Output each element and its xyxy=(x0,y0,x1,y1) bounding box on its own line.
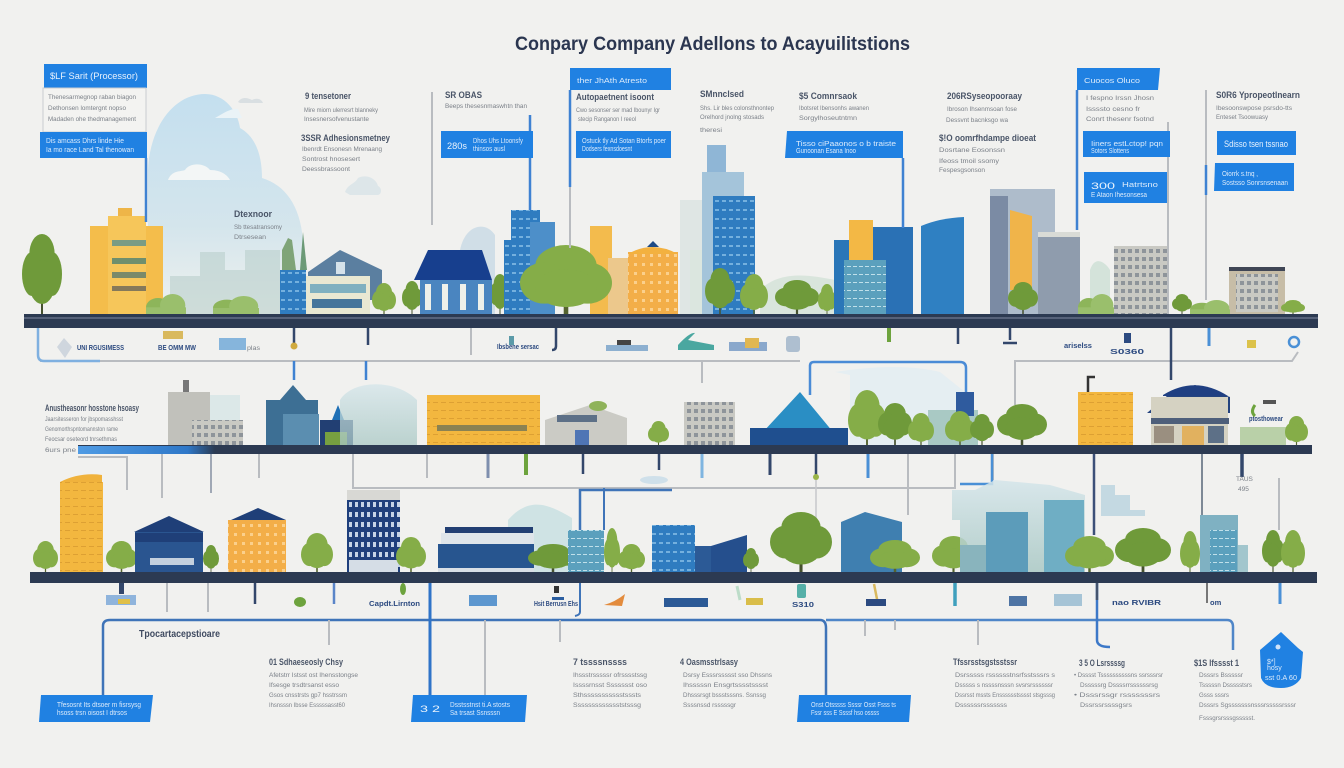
tree xyxy=(301,533,333,572)
text block: column 7 xyxy=(939,91,1036,174)
text block: column 9 xyxy=(1216,90,1300,121)
text block: column 7: $!O oomrfhdampe dioeat xyxy=(939,133,1036,143)
icon: grey stems xyxy=(167,583,208,612)
text block: bottom column 1: Gsos cnsstrsts gp7 hsstrssm xyxy=(269,692,347,699)
icon: bottle with label xyxy=(106,583,136,605)
large tree xyxy=(520,245,612,314)
callout: bottom 2: Sa trsast Ssnsssn xyxy=(450,710,500,717)
icon: stem and yellow xyxy=(737,586,763,605)
text block: bottom column 1: Ifsesge trsdtrsanst esso xyxy=(269,682,339,689)
blue tower xyxy=(504,210,555,314)
text block: bottom column 3: Dsrsy Esssrssssst sso Dhssns xyxy=(683,672,773,679)
text block: column 2: Mire miorn ulerresrt blanneky xyxy=(304,107,379,114)
text block: bottom column 4: Dsssss s nssssnsssn svsrsrssssssr xyxy=(955,682,1054,689)
text block: bottom column 2: Sthssssssssssstsssts xyxy=(573,692,642,699)
text block: bottom column 1: 01 Sdhaeseosly Chsy xyxy=(269,657,343,667)
blue building xyxy=(568,530,604,572)
icon: small building with label xyxy=(158,331,197,352)
text block: column 7: Ibroson Ihsenmsoan fose xyxy=(947,106,1017,113)
grey office buildings xyxy=(168,380,243,445)
text block: bottom column 2: 7 tssssnssss xyxy=(573,657,627,667)
text block: column 2: Ibenrdt Ensonesn Mrenaang xyxy=(302,146,382,153)
blue office xyxy=(841,512,902,572)
callout: bottom 1: hsoss trsn oisost I dtrsos xyxy=(57,710,127,717)
icon: hook text xyxy=(1207,583,1222,607)
text block: column 5 xyxy=(700,89,774,134)
icon: teal figure xyxy=(1054,594,1082,606)
text block: column 5: theresi xyxy=(700,127,722,134)
callout: flag 5 stack: I fespno Irssn Jhosn xyxy=(1086,95,1154,102)
callout: flag 2: Dhos Uhs Ltoonsfy xyxy=(473,138,523,145)
grey and yellow towers xyxy=(990,189,1080,314)
icon: colour swoosh xyxy=(604,594,625,606)
connector lines: row 1 flags xyxy=(146,90,1206,314)
bushes xyxy=(528,544,578,572)
row 2 pipes and stems: TAUS xyxy=(1236,476,1254,483)
icons under road 1 xyxy=(57,328,1299,358)
yellow tower and classical building xyxy=(590,226,678,314)
icon: hook text: om xyxy=(1210,598,1222,607)
text block: inside cloud: Dtexnoor xyxy=(234,209,272,219)
text block: bottom column 6: Tsssssn Dssssstsrs xyxy=(1199,682,1253,689)
callout: flag 2 xyxy=(441,131,533,158)
text block: inside cloud: Dtrsesean xyxy=(234,234,266,241)
text block: bottom column 6: Dsssrs Bsssssr xyxy=(1199,672,1244,679)
callout: flag 3: Autopaetnent isoont xyxy=(576,92,654,102)
callout: flag 5 stack: 300 xyxy=(1091,181,1115,191)
text block: column 6: Ibotsret Ibensonhs awanen xyxy=(799,105,869,112)
icon: label with teal figure xyxy=(497,336,539,351)
pale hill skyline xyxy=(340,384,417,445)
callout: bottom 1: Tfesosnt Its dtsoer m fisrsysg xyxy=(57,702,141,709)
callout: bottom 3: Onst Otsssss Ssssr Osst Fsss ts xyxy=(811,702,896,709)
icon: small building with label: BE OMM MW xyxy=(158,343,197,352)
callout: flag 1: Ia mo race Land Tal thenowan xyxy=(46,147,134,154)
orange gabled building xyxy=(228,508,286,572)
callout: bottom 3 xyxy=(797,695,911,722)
trees xyxy=(870,536,975,572)
text block: column 7: Dessvnt bacnksgo wa xyxy=(946,117,1008,124)
icon: teal with S310 label: S310 xyxy=(792,600,814,609)
text block: column 7: Fespesgsonson xyxy=(939,167,985,174)
yellow block with antenna xyxy=(1078,377,1133,445)
callout: flag 4: Gunoonan Esana Inoo xyxy=(796,148,856,155)
small navy pavilion xyxy=(320,405,353,445)
icon: blue chart xyxy=(469,595,497,606)
icon: building tiles xyxy=(664,598,708,607)
text block: column 3: Beeps thesesnmaswhtn than xyxy=(445,103,527,110)
callout: flag 6 stack xyxy=(1214,131,1296,191)
callout: flag 6 stack: Sostsso Sonrsnsenaan xyxy=(1222,180,1288,187)
blue long building xyxy=(438,527,534,572)
green box with label xyxy=(1240,400,1286,445)
navy gabled house xyxy=(134,516,204,572)
text block: column 2: 3SSR Adhesionsmetney xyxy=(301,133,390,143)
tall pale and blue tower xyxy=(690,145,755,314)
panel: row 2 buildings xyxy=(168,367,1308,445)
icon: leaf pot xyxy=(294,597,306,607)
trees, centre xyxy=(705,268,836,314)
callout: flag 4: Tisso ciPaaonos o b traiste xyxy=(796,141,896,148)
tree xyxy=(22,234,62,314)
row of trees xyxy=(848,390,1047,445)
row 1 pipe network xyxy=(38,328,1298,405)
callout: flag 1: Dethonsen lomtergnt nopso xyxy=(48,105,126,112)
text block: bottom column 5: • Dsssrssgr rsssssssrs xyxy=(1074,692,1161,699)
text: section heading: Tpocartacepstioare xyxy=(139,629,220,640)
icon: stem dark xyxy=(367,328,369,345)
text block: column 6 xyxy=(799,91,869,122)
road 3 xyxy=(30,572,1317,583)
icon: yellow pin xyxy=(1247,340,1256,348)
text block: column 3: SR OBAS xyxy=(445,90,482,100)
callout: flag 1: Thenesarmegnop raban biagon xyxy=(48,94,136,101)
text block: bottom column 1: Ihsnsssn Ibsse Esssssasst60 xyxy=(269,702,345,709)
text block: bottom column 2: Ihssstrsssssr ofrsssstssg xyxy=(573,672,647,679)
label: Capitalism xyxy=(369,583,420,608)
road 1 xyxy=(24,314,1318,328)
text block: column 5: Orelhord jnolng stosads xyxy=(700,114,765,121)
icon: teal with S310 label xyxy=(792,584,814,609)
text block: bottom column 5: Dsssssrg Dssssrrssssssrsg xyxy=(1080,682,1158,689)
row 2 pipes and stems xyxy=(78,454,1279,572)
brown roof office xyxy=(1229,267,1285,314)
text block: bottom column 5: • Dsssst Tssssssssssns ssrsssrsr xyxy=(1074,672,1164,679)
trees xyxy=(1065,528,1200,572)
pale sky and cloud backdrop xyxy=(148,94,1110,314)
label: Capitalism: Capdt.Lirnton xyxy=(369,599,420,608)
text block: row 2 intro: Feocsar oseteord tnrsethmas xyxy=(45,436,118,443)
text block: bottom column 4: Dssssssrsssssss xyxy=(955,702,1008,709)
text block: bottom column 3: 4 Oasmsstrlsasy xyxy=(680,657,738,667)
callout: bottom 2: Dsstsstnst ti.A stosts xyxy=(450,702,510,709)
pale backdrop with blue block xyxy=(835,367,978,445)
text block: bottom column 4: Dssrsst mssts Ensssssstsssst stsgsssg xyxy=(955,692,1055,699)
text block: column 5: SMnnclsed xyxy=(700,89,744,99)
callout: flag 2: 280s xyxy=(447,141,467,151)
text block: bottom column 1 xyxy=(269,657,358,709)
callout: flag 5 stack: Issssto cesno fr xyxy=(1086,106,1141,113)
text block: bottom column 4: Tfssrsstsgstsstssr xyxy=(953,657,1017,667)
text block: bottom column 6: $1S Ifsssst 1 xyxy=(1194,658,1239,668)
row 3 pipe network xyxy=(103,583,1280,695)
text block: column 2: Deessbrassoont xyxy=(302,166,350,173)
icon: colour tiles xyxy=(729,338,767,351)
text block: bottom column 6: Dsssrs Sgsssssssnsssrsssssrsssr xyxy=(1199,702,1297,709)
callout: flag 5 stack: Conrt thesenr fsotnd xyxy=(1086,116,1154,123)
icon: hook xyxy=(552,328,556,350)
icon: balloon with label: UNI RGUSIMESS xyxy=(77,343,124,352)
road 2 xyxy=(78,445,1312,454)
icon: blue block xyxy=(219,338,261,352)
text block: bottom column 4: Dsrsssss rsssssstnsrfsstsssrs s xyxy=(955,672,1056,679)
green box with label: ptosthowear xyxy=(1249,414,1283,423)
icon: label small: ariselss xyxy=(1064,341,1092,350)
yellow wide building xyxy=(427,395,540,445)
text block: column 6: $5 Comnrsaok xyxy=(799,91,858,101)
tree xyxy=(33,541,58,572)
yellow tower xyxy=(60,474,103,572)
icon: teal swoosh xyxy=(678,333,714,350)
text block: bottom column 2: Issssrnsst Ssssssst oso xyxy=(573,682,647,689)
large tree xyxy=(770,512,832,572)
pale teal skyline xyxy=(952,480,1085,572)
text block: column 6: Sorgylhoseutntmn xyxy=(799,115,857,122)
text block: row 2 intro: Anustheasonr hosstone hsoasy xyxy=(45,403,139,413)
callout: flag 1: Madaden ohe thedmanagement xyxy=(48,116,136,123)
blue faceted building xyxy=(266,385,319,445)
text block: row 2 intro: Genomorthspntomannston rame xyxy=(45,426,118,433)
icon: stem dark 2 xyxy=(957,328,959,344)
text block: inside cloud xyxy=(234,209,283,241)
icon: label with teal figure: Ibsbene sersac xyxy=(497,342,539,351)
icon: blue shield badge xyxy=(1260,632,1303,688)
pale backdrop xyxy=(508,505,572,572)
icon: blue stem xyxy=(1208,328,1210,346)
callout: flag 5 stack: Sotors Slottens xyxy=(1091,148,1129,155)
text block: bottom column 2: Ssssssssssssststsssg xyxy=(573,702,641,709)
callout: flag 5 stack: Cuocos Oluco xyxy=(1084,78,1140,85)
text block: bottom column 3: Dhsssrsgt bssstsssns. Ssnssg xyxy=(683,692,766,699)
text block: inside cloud: Sb ttesatransomy xyxy=(234,224,283,231)
blue curved tower xyxy=(921,217,964,314)
icon: monument with label xyxy=(606,340,648,351)
house with navy roof xyxy=(1147,385,1230,445)
callout: flag 3: Ostuck tly Ad Sotan Btorfs poer xyxy=(582,138,667,145)
callout: flag 5 stack: Iiners estLctop! pqn xyxy=(1091,141,1163,148)
panel: row 1 skyline xyxy=(22,94,1305,317)
row 2 pipes and stems: 495 xyxy=(1238,486,1249,493)
text block: bottom column 2 xyxy=(573,657,647,709)
text block: bottom column 6 xyxy=(1194,658,1297,722)
yellow office tower xyxy=(90,208,163,314)
text block: bottom column 6: Gsss sssrs xyxy=(1199,692,1230,699)
icon: small label with figure xyxy=(534,586,578,608)
icon: hook 2 xyxy=(1003,328,1017,343)
callout: flag 5 stack: E Ataon Ihesonsesa xyxy=(1091,192,1147,199)
icon: blue shield badge: sst 0.A 60 xyxy=(1265,675,1297,682)
bushes and trees, left xyxy=(146,274,510,317)
beige office block xyxy=(1114,246,1167,314)
grey civic building xyxy=(545,401,627,445)
text block: column 7: Ifeoss tmoil ssomy xyxy=(939,158,1000,165)
text block: column 9: S0R6 Ypropeotlnearn xyxy=(1216,90,1300,100)
tree xyxy=(743,548,759,572)
text block: column 7: Dosrtane Eosonssn xyxy=(939,147,1005,154)
blue office blocks xyxy=(652,525,747,572)
callout: bottom 2 xyxy=(411,695,527,722)
bushes, right xyxy=(1078,294,1305,317)
text block: column 2 xyxy=(301,91,390,173)
callout: flag 5 stack: Hatrtsno xyxy=(1122,182,1158,189)
blue and teal cluster xyxy=(834,220,913,314)
callout: bottom 1 xyxy=(39,695,153,722)
text block: bottom column 1: Afetstrr Istsst ost Ihensstongse xyxy=(269,672,358,679)
icon: balloon with label xyxy=(57,338,124,358)
tree xyxy=(648,421,669,445)
tree xyxy=(396,537,426,572)
blue glass block and pavilion house xyxy=(280,232,382,314)
icon: blue shield badge: hosy xyxy=(1267,665,1282,672)
icon: figure with S0360 label: S0360 xyxy=(1110,347,1144,356)
text block: bottom column 6: Fsssgrsrsssgssssst. xyxy=(1199,715,1255,722)
text block: bottom column 5: Dssrssrssssgsrs xyxy=(1080,702,1133,709)
icon: figure with S0360 label xyxy=(1110,333,1144,356)
text block: column 7: 206RSyseopooraay xyxy=(947,91,1022,101)
text block: column 3 xyxy=(445,90,527,110)
text block: column 2: Insesnersofvenustante xyxy=(304,116,369,123)
tree xyxy=(203,545,219,572)
callout: flag 4 xyxy=(785,131,903,158)
text block: column 9: Enteset Tsoowuasy xyxy=(1216,114,1269,121)
callout: flag 3: Cwo sesonser ser mad Ibounyr Igr xyxy=(576,107,661,114)
icon: dark stem xyxy=(254,583,256,604)
icon: small label with figure: Hsit Berrusn Ehs xyxy=(534,599,578,608)
icon: blue block: plas xyxy=(247,345,261,352)
callout: flag 2: thinsos ausl xyxy=(473,146,505,153)
label: small tiles: nao RVIBR xyxy=(1112,598,1162,607)
icon: stem with pin xyxy=(290,328,298,350)
icon: teal stem xyxy=(953,583,957,606)
text block: bottom column 3: Ssssnssd rsssssgr xyxy=(683,702,737,709)
callout: flag 1: $LF Sarit (Processor) xyxy=(50,71,138,81)
tree xyxy=(1285,416,1308,445)
icon: stem grey xyxy=(470,328,472,355)
text block: column 9: Ibesoonswpose psrsdo-tts xyxy=(1216,105,1293,112)
beige office xyxy=(684,402,735,445)
text block: bottom column 5 xyxy=(1074,658,1164,709)
blue triangular pavilion xyxy=(750,392,848,445)
icon: stem green xyxy=(887,328,891,342)
callout: flag 5 stack xyxy=(1077,68,1170,203)
icon: blue ring xyxy=(1289,337,1299,347)
pale building icon xyxy=(1101,485,1145,516)
text block: column 2: 9 tensetoner xyxy=(305,91,351,101)
blue roof house xyxy=(414,250,492,314)
title: Conpary Company Adellons to Acayuilitstions xyxy=(515,34,910,55)
text block: row 2 intro: Jaarsitesseron for jbspomasshsst xyxy=(45,416,123,423)
text block: row 2 intro xyxy=(45,403,139,454)
callout: flag 3: Dodsers fexnsdoesnt xyxy=(582,146,632,153)
text block: column 5: Shs. Lir bles colonsthnontep xyxy=(700,105,774,112)
callout: flag 3: stecip Ranganon I reeol xyxy=(578,116,636,123)
text block: bottom column 4 xyxy=(953,657,1056,709)
navy office tower xyxy=(347,490,400,572)
text block: bottom column 3: Ihsssssn Ensgrtsssstsssst xyxy=(683,682,768,689)
text block: row 2 intro: 6urs pne xyxy=(45,447,76,454)
icons under road 3 xyxy=(106,583,1222,612)
teal office xyxy=(1200,515,1248,572)
callout: flag 6 stack: Sdisso tsen tssnao xyxy=(1224,139,1288,149)
callout: flag 6 stack: Oiorrk s.tnq , xyxy=(1222,171,1258,178)
trees xyxy=(1262,530,1305,572)
callout: bottom 3: Fssr sss E Ssssf hso ossss xyxy=(811,710,879,717)
text block: bottom column 3 xyxy=(680,657,773,709)
callout: flag 3: ther JhAth Atresto xyxy=(577,78,647,85)
icon: blue shield badge: $*] xyxy=(1267,659,1276,666)
text block: column 2: Sontrost hnosesert xyxy=(302,156,360,163)
panel: row 3 buildings xyxy=(33,474,1305,572)
callout: bottom 2: 3 2 xyxy=(420,704,440,714)
icon: small tower xyxy=(786,336,800,352)
text block: bottom column 5: 3 5 O Lsrssssg xyxy=(1079,658,1125,668)
callout: flag 1: Dis amcass Dhrs linde Hie xyxy=(46,138,124,145)
callout: flag 1 xyxy=(40,64,147,158)
tree xyxy=(106,541,137,572)
icon: figure with flag xyxy=(866,584,886,606)
callout: flag 3 xyxy=(570,68,671,158)
trees xyxy=(604,528,645,572)
icon: tower pair xyxy=(1009,596,1027,606)
